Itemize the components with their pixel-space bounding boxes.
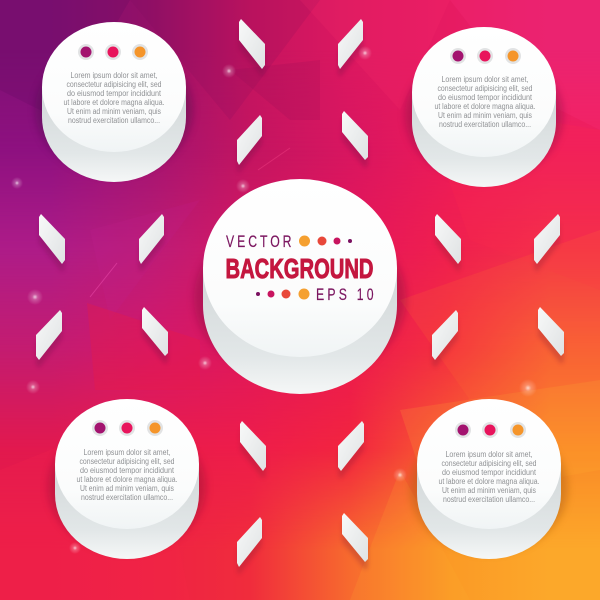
title: eps 10: EPS 10: [316, 286, 374, 305]
body text: ut labore et dolore magna aliqua.: [438, 477, 540, 486]
body text: Lorem ipsum dolor sit amet,: [84, 448, 170, 457]
body text: nostrud exercitation ullamco...: [443, 495, 535, 504]
body text: ut labore et dolore magna aliqua.: [64, 98, 164, 107]
body text: do eiusmod tempor incididunt: [80, 466, 175, 475]
body text: Ut enim ad minim veniam, quis: [438, 111, 532, 120]
status dots: [92, 420, 163, 436]
status dots: [455, 422, 526, 438]
title: vector: VECTOR: [226, 233, 292, 252]
body text: ut labore et dolore magna aliqua.: [76, 475, 178, 484]
body text: nostrud exercitation ullamco...: [68, 116, 160, 125]
dots row below title: [256, 288, 310, 300]
status dots: [78, 44, 148, 60]
disc: bottom right panel: [410, 399, 568, 559]
body text: consectetur adipisicing elit, sed: [442, 459, 536, 468]
body text: ut labore et dolore magna aliqua.: [434, 102, 536, 111]
disc: centre title panel: [194, 179, 406, 394]
body text: do eiusmod tempor incididunt: [438, 93, 533, 102]
body text: Lorem ipsum dolor sit amet,: [446, 450, 532, 459]
bars: bottom group: [237, 421, 368, 575]
body text: nostrud exercitation ullamco...: [439, 120, 531, 129]
bars: top group: [237, 19, 368, 173]
body text: Ut enim ad minim veniam, quis: [442, 486, 536, 495]
body text: Ut enim ad minim veniam, quis: [67, 107, 161, 116]
disc: top left panel: [35, 22, 193, 182]
body text: Lorem ipsum dolor sit amet,: [442, 75, 528, 84]
disc: top right panel: [405, 27, 563, 187]
body text: Ut enim ad minim veniam, quis: [80, 484, 174, 493]
bars: right group: [432, 214, 564, 368]
body text: [434, 75, 536, 129]
body text: do eiusmod tempor incididunt: [67, 89, 162, 98]
body text: [438, 450, 540, 504]
status dots: [450, 48, 521, 64]
body text: consectetur adipisicing elit, sed: [80, 457, 174, 466]
body text: [64, 71, 164, 125]
dots row above title: [299, 236, 352, 246]
body text: do eiusmod tempor incididunt: [442, 468, 537, 477]
disc: bottom left panel: [48, 399, 206, 559]
glare sparkles: [11, 46, 537, 554]
body text: consectetur adipisicing elit, sed: [438, 84, 532, 93]
title: background: BACKGROUND: [226, 253, 374, 284]
bars: left group: [36, 214, 168, 368]
body text: Lorem ipsum dolor sit amet,: [70, 71, 158, 80]
body text: [76, 448, 178, 502]
body text: nostrud exercitation ullamco...: [81, 493, 173, 502]
body text: consectetur adipisicing elit, sed: [66, 80, 162, 89]
